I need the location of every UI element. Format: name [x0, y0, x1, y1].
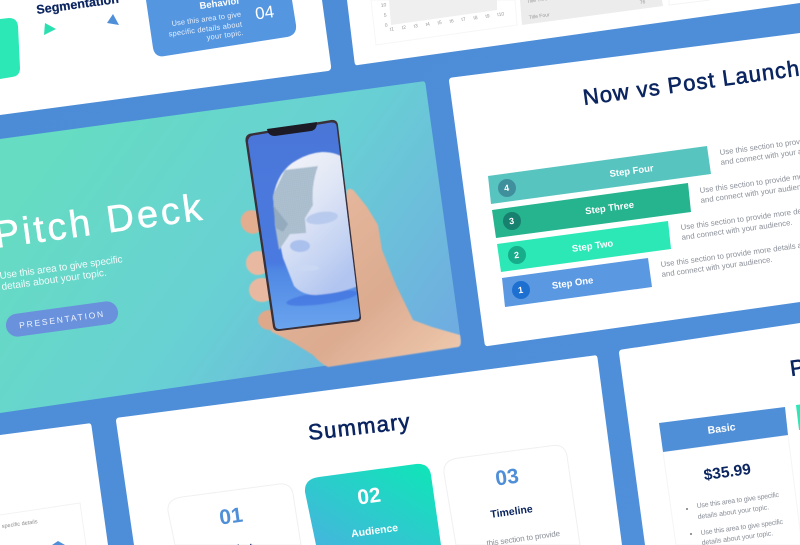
- chart: t1 t2 t3 t4 t5 t6 t7 t8 t9 t10: [389, 11, 505, 33]
- illustration: hand holding phone: [236, 120, 461, 367]
- panel: now vs post launch slide: [449, 33, 800, 346]
- icon: blue triangle: [52, 541, 65, 545]
- step two: and connect with your audience.: [681, 218, 793, 242]
- step two: [497, 202, 800, 272]
- card: behavior: specific details about: [168, 20, 243, 38]
- phone notch: [267, 122, 317, 136]
- table: [520, 0, 663, 25]
- heading: now vs post launch: Now vs Post Launch: [581, 56, 800, 110]
- chart: 10: [380, 2, 387, 9]
- icon: blue triangle: [107, 14, 119, 25]
- phone: [245, 120, 362, 331]
- card: behavior: [146, 0, 296, 56]
- card 02: Audience: [350, 522, 399, 540]
- card: behavior: your topic.: [206, 28, 244, 42]
- hero subtitle: details about your topic.: [1, 268, 107, 293]
- hero subtitle: Use this area to give specific: [0, 254, 123, 282]
- heading: summary: Summary: [307, 409, 411, 445]
- illustration: face: [273, 152, 362, 309]
- panel: segmentation slide: [0, 0, 331, 115]
- pricing column: basic: Basic: [707, 421, 736, 437]
- card 02: 02: [356, 484, 382, 510]
- panel: hero pitch deck slide: [0, 81, 461, 413]
- step four: 4: [503, 183, 510, 193]
- step four: [488, 127, 800, 204]
- panel: pricing slide: [619, 323, 800, 545]
- panel: summary slide: [116, 355, 622, 545]
- card 03: [444, 445, 580, 545]
- step one: 1: [517, 285, 524, 295]
- card 01: [168, 484, 301, 545]
- table: Title Four: [528, 12, 550, 21]
- caption: specific details: [1, 519, 38, 530]
- icon: green triangle: [44, 23, 56, 35]
- face mesh: [273, 166, 318, 250]
- chart: 0: [384, 23, 388, 29]
- step three: 3: [508, 216, 515, 226]
- pricing column: basic: [659, 407, 800, 545]
- card: behavior: Use this area to give: [171, 10, 242, 28]
- step one: [502, 239, 800, 307]
- panel: lower left slide: [0, 423, 108, 545]
- chart: 5: [383, 13, 387, 19]
- pricing column: green header: [796, 404, 800, 430]
- step four: Step Four: [609, 163, 655, 180]
- step three: Step Three: [585, 200, 635, 217]
- pricing column: basic: Use this area to give specific: [700, 519, 784, 537]
- phone screen: [248, 122, 360, 329]
- step one: and connect with your audience.: [661, 255, 773, 279]
- card 02: [305, 464, 441, 545]
- step two: 2: [513, 250, 520, 260]
- card 03: 03: [494, 465, 520, 491]
- panel: chart and table slide: [347, 0, 800, 65]
- chart: [371, 0, 517, 45]
- button: presentation: PRESENTATION: [19, 309, 106, 330]
- pricing column: basic: details about your topic.: [697, 504, 770, 521]
- step one: Step One: [551, 275, 594, 292]
- pricing column: basic: $35.99: [703, 461, 752, 484]
- card 03: Timeline: [490, 503, 534, 521]
- pricing column: basic: Use this area to give specific: [696, 492, 780, 510]
- inner box: [0, 503, 86, 545]
- button: presentation: [4, 300, 120, 338]
- step two: Step Two: [571, 238, 614, 255]
- green card fragment: [0, 18, 20, 79]
- card: behavior: 04: [254, 2, 275, 23]
- step three: [492, 165, 800, 238]
- card 01: 01: [218, 504, 245, 530]
- hand: [236, 189, 461, 367]
